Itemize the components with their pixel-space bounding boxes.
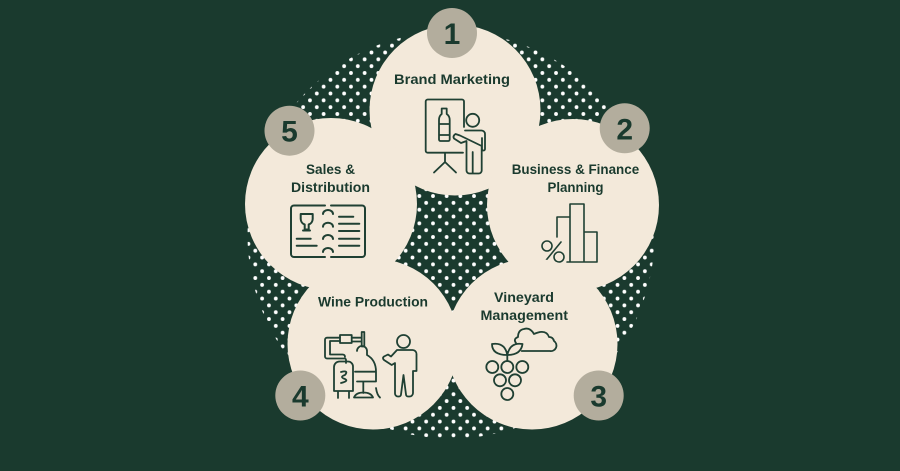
icon: grapes and cloud xyxy=(486,329,556,400)
badge: 1: 1 xyxy=(444,18,460,51)
panel: brand marketing xyxy=(370,24,540,196)
badge: 5 xyxy=(264,106,314,156)
badge: 3: 3 xyxy=(590,380,607,414)
badge: 3 xyxy=(574,370,624,420)
badge: 4: 4 xyxy=(292,380,309,414)
panel: vineyard management xyxy=(446,258,618,430)
icon: presenter with wine bottle xyxy=(426,100,485,174)
badge: 2 xyxy=(600,103,650,153)
heading: business and finance planning: Planning xyxy=(548,180,604,195)
icon: bar chart with percent xyxy=(542,204,597,262)
heading: sales and distribution: Distribution xyxy=(291,180,370,195)
dotted circle backdrop xyxy=(248,32,654,438)
panel: business and finance planning xyxy=(487,119,659,291)
heading: vineyard management xyxy=(480,290,569,323)
badge: 1 xyxy=(427,8,477,58)
icon: distillery and winemaker xyxy=(325,332,416,398)
icon: wine menu book xyxy=(291,206,365,257)
panel: wine production xyxy=(288,258,458,430)
heading: vineyard management: Vineyard xyxy=(494,290,554,305)
badge: 5: 5 xyxy=(281,116,298,149)
heading: vineyard management: Management xyxy=(480,308,569,323)
panel: sales and distribution xyxy=(245,118,417,290)
heading: wine production: Wine Production xyxy=(318,294,428,310)
heading: business and finance planning: Business & Finance xyxy=(512,162,640,177)
heading: sales and distribution xyxy=(291,162,370,195)
badge: 2: 2 xyxy=(616,113,633,146)
heading: brand marketing: Brand Marketing xyxy=(394,72,510,87)
heading: business and finance planning xyxy=(512,162,640,195)
heading: sales and distribution: Sales & xyxy=(306,162,355,177)
badge: 4 xyxy=(275,370,325,420)
